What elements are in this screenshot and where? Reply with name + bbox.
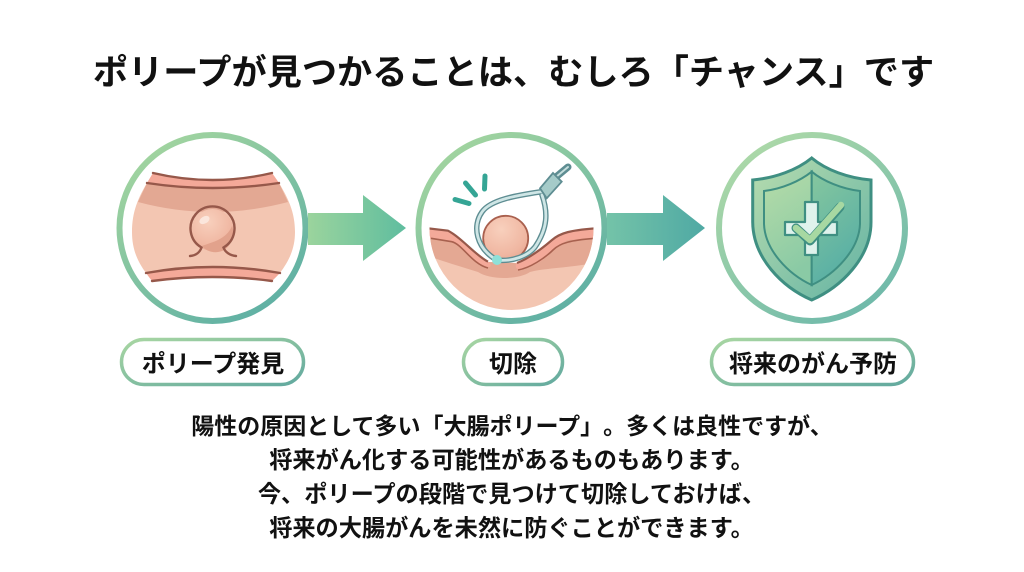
body text: 将来がん化する可能性があるものもあります。 — [269, 447, 754, 473]
label: future cancer prevention — [712, 340, 914, 384]
panel: polyp removal illustration — [418, 135, 604, 321]
label: polyp discovery — [122, 340, 304, 384]
check mark — [796, 205, 841, 241]
label: removal — [464, 340, 562, 384]
body text — [191, 413, 833, 541]
circle ring — [120, 135, 306, 321]
panel: cancer prevention illustration — [719, 135, 905, 321]
intestine cross-section — [132, 173, 295, 281]
shield — [753, 158, 871, 300]
label: future cancer prevention: 将来のがん予防 — [729, 350, 897, 378]
title: ポリープが見つかることは、むしろ「チャンス」です — [93, 54, 934, 92]
body text: 陽性の原因として多い「大腸ポリープ」。多くは良性ですが、 — [191, 413, 833, 439]
arrow: discovery to removal — [308, 195, 406, 261]
panel: polyp discovery illustration — [120, 135, 306, 321]
body text: 将来の大腸がんを未然に防ぐことができます。 — [269, 515, 754, 541]
medical cross — [785, 202, 837, 255]
label: removal: 切除 — [489, 351, 537, 378]
infographic canvas — [94, 54, 932, 539]
body text: 今、ポリープの段階で見つけて切除しておけば、 — [258, 481, 765, 507]
tissue — [430, 227, 594, 310]
snare tool — [477, 167, 568, 265]
arrow: removal to prevention — [607, 195, 705, 261]
polyp — [483, 216, 528, 261]
motion ticks — [455, 176, 485, 204]
polyp — [190, 206, 236, 256]
label: polyp discovery: ポリープ発見 — [142, 351, 284, 378]
circle ring — [719, 135, 905, 321]
circle ring — [418, 135, 604, 321]
